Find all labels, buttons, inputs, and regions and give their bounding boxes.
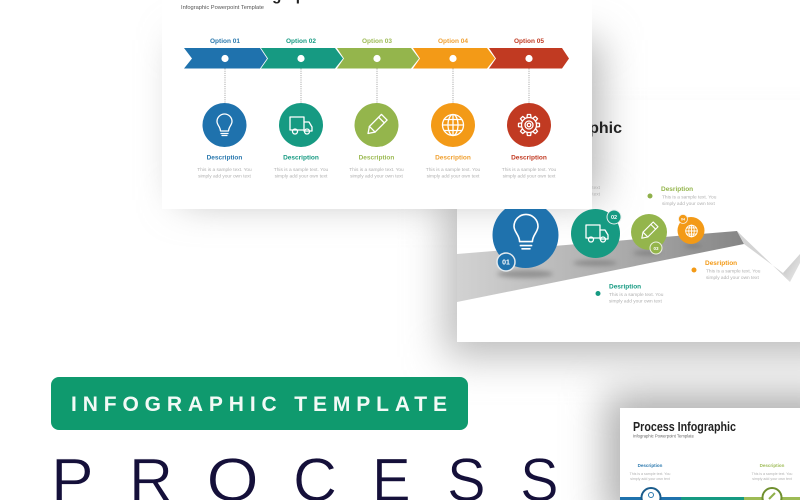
slide subtitle: Infographic Powerpoint Template xyxy=(633,434,695,438)
step 5: gear: Description xyxy=(511,154,547,162)
label: green: Desription xyxy=(661,186,693,193)
blue description xyxy=(630,463,670,481)
process band xyxy=(620,488,800,500)
option labels xyxy=(210,38,544,45)
step 2: truck: This is a sample text. You xyxy=(274,167,329,173)
step 02 circle: 02 xyxy=(611,215,617,221)
step 01 circle: 01 xyxy=(502,260,510,266)
shadow: top slide xyxy=(180,40,600,200)
chevron timeline xyxy=(184,48,569,68)
blue description: This is a sample text. You xyxy=(630,472,670,476)
option labels: Option 05 xyxy=(514,38,544,45)
panel: top slide xyxy=(162,0,592,209)
step 2: truck: simply add your own text xyxy=(275,174,328,180)
step 1: bulb: This is a sample text. You xyxy=(197,167,252,173)
badge: infographic template xyxy=(51,377,468,430)
label: teal: This is a sample text. You xyxy=(609,292,664,298)
slide subtitle: Infographic Powerpoint Template xyxy=(181,5,264,11)
label: orange: Desription xyxy=(705,260,737,267)
circle shadows xyxy=(497,244,702,278)
shadow: bottom right slide xyxy=(605,392,800,500)
label: green xyxy=(648,186,717,207)
green description: simply add your own text xyxy=(752,477,792,481)
step 04 circle xyxy=(678,214,704,244)
panel: middle slide content xyxy=(457,120,800,304)
step 1: bulb: Description xyxy=(207,154,242,162)
badge: infographic template: INFOGRAPHIC TEMPLATE xyxy=(71,393,447,416)
option labels: Option 01 xyxy=(210,38,240,45)
step 2: truck xyxy=(274,103,329,180)
green description xyxy=(752,463,792,481)
green description: Description xyxy=(760,463,785,468)
label: orange: simply add your own text xyxy=(706,275,759,281)
option labels: Option 04 xyxy=(438,38,468,45)
step 3: pencil xyxy=(349,103,404,180)
step 3: pencil: Description xyxy=(359,154,394,162)
fragment text: This is a sample text xyxy=(556,185,601,191)
label: green: This is a sample text. You xyxy=(662,194,717,200)
main heading xyxy=(51,446,559,500)
step 03 circle xyxy=(631,214,667,254)
step 04 circle: 04 xyxy=(681,218,685,222)
slide title: Process Infographic xyxy=(633,420,736,434)
step 1: bulb: simply add your own text xyxy=(198,174,252,180)
label: orange: This is a sample text. You xyxy=(706,268,761,274)
step 5: gear: This is a sample text. You xyxy=(502,167,557,173)
step 5: gear xyxy=(502,103,557,180)
step 4: globe: This is a sample text. You xyxy=(426,167,481,173)
panel: bottom right slide xyxy=(620,408,800,500)
label: orange xyxy=(692,260,761,281)
step 03 circle: 03 xyxy=(653,246,659,251)
step 3: pencil: simply add your own text xyxy=(350,174,404,180)
blue description: simply add your own text xyxy=(630,477,670,481)
ribbon fold up xyxy=(783,254,800,282)
grey ribbon xyxy=(457,231,744,302)
label: green: simply add your own text xyxy=(662,201,715,207)
step 5: gear: simply add your own text xyxy=(503,174,556,180)
shadow: middle slide xyxy=(445,135,800,357)
label: teal: Desription xyxy=(609,284,641,290)
step 4: globe: Description xyxy=(435,154,471,162)
step 3: pencil: This is a sample text. You xyxy=(349,167,404,173)
fragment text xyxy=(592,186,600,196)
option labels: Option 03 xyxy=(362,38,392,45)
slide title fragment: Process Infographic xyxy=(468,120,622,137)
blue description: Description xyxy=(638,463,663,468)
label: teal: simply add your own text xyxy=(609,298,662,304)
label: teal xyxy=(596,284,664,304)
step 02 circle xyxy=(571,209,621,258)
step 4: globe: simply add your own text xyxy=(427,174,480,180)
step 01 circle xyxy=(492,202,558,271)
fragment text: simply add your own text xyxy=(547,192,601,198)
green description: This is a sample text. You xyxy=(752,472,792,476)
connectors and dots xyxy=(221,55,533,103)
panel: middle slide background xyxy=(457,100,800,342)
step 2: truck: Description xyxy=(283,154,319,162)
step 4: globe xyxy=(426,103,481,180)
option labels: Option 02 xyxy=(286,38,316,45)
ribbon fold xyxy=(737,231,790,282)
step 1: bulb xyxy=(197,103,252,180)
